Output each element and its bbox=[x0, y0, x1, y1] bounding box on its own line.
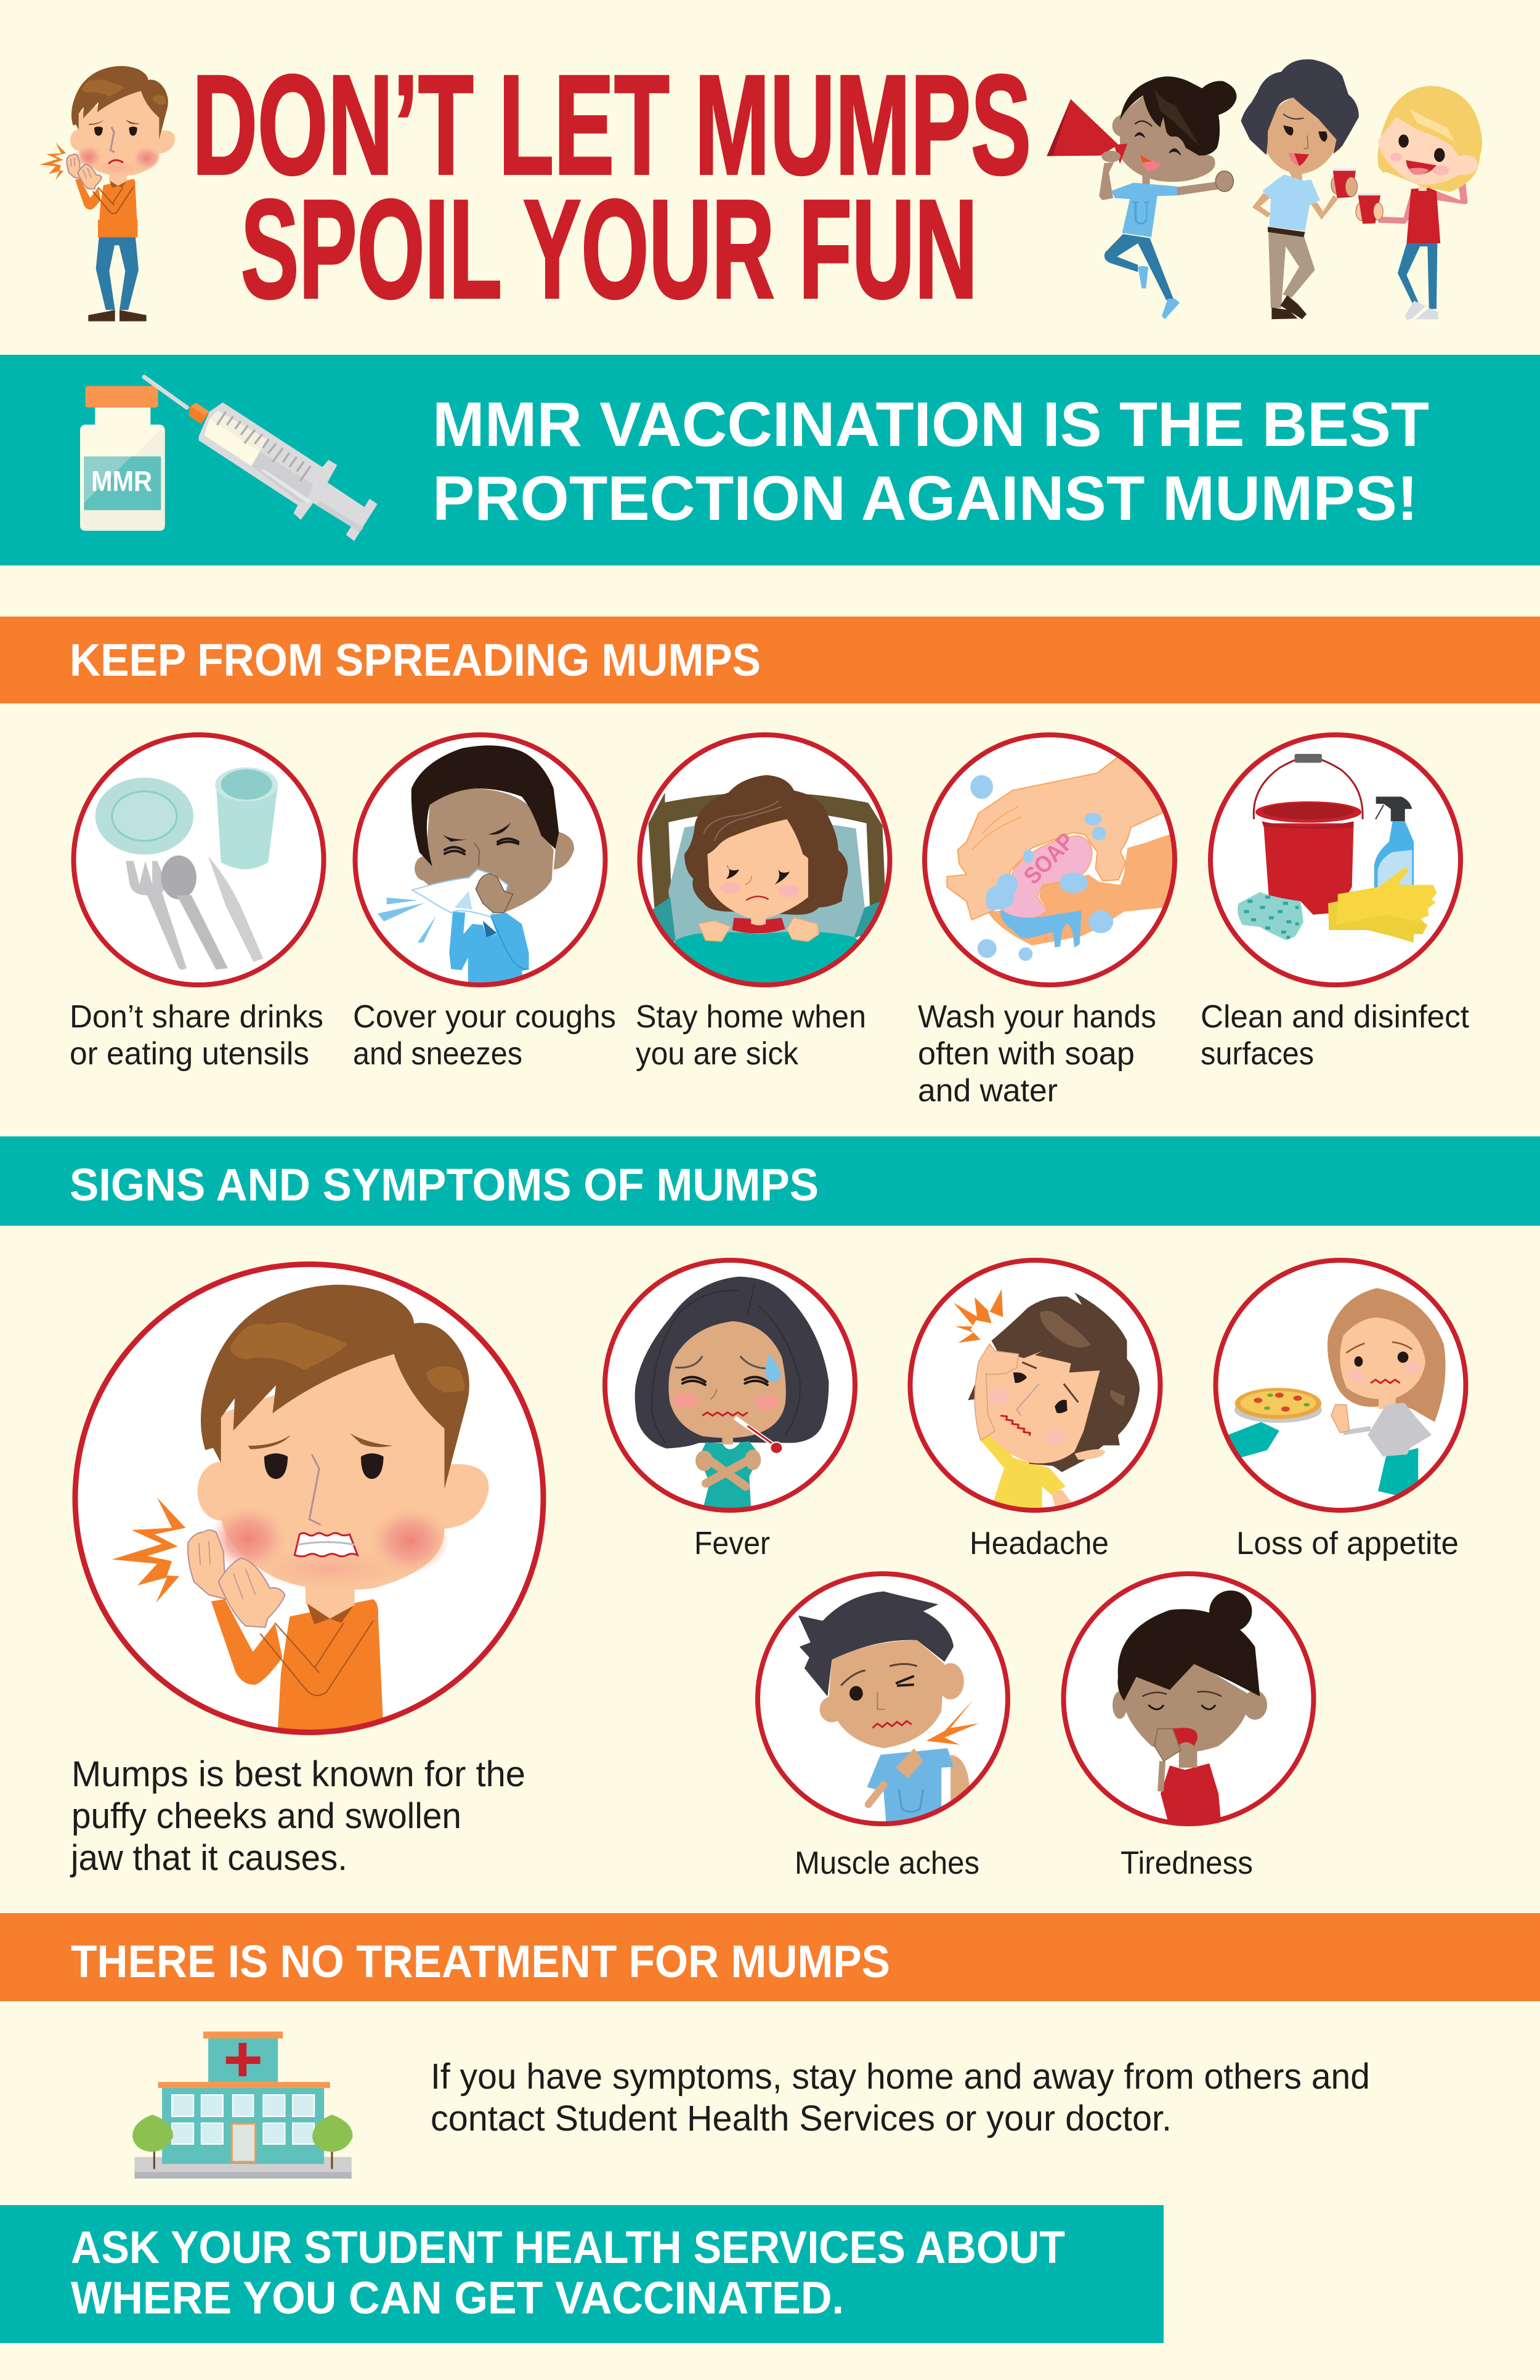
section: keep from spreading mumps: KEEP FROM SPREADING MUMPS bbox=[70, 634, 761, 686]
title: SPOIL YOUR FUN bbox=[241, 171, 978, 328]
label: fever: Fever bbox=[694, 1526, 770, 1561]
icon: cleaning supplies bbox=[1210, 735, 1461, 985]
icon: sick girl in bed bbox=[639, 735, 890, 990]
text: cover coughs: and sneezes bbox=[353, 1036, 522, 1072]
text: cover coughs: Cover your coughs bbox=[353, 999, 616, 1035]
text: clean surfaces bbox=[1201, 999, 1470, 1072]
label: headache: Headache bbox=[970, 1526, 1109, 1561]
callout: ask student health services: WHERE YOU CAN GET VACCINATED. bbox=[71, 2272, 844, 2323]
icon: muscle aches bbox=[758, 1574, 1008, 1828]
icon: man with cup bbox=[1241, 59, 1359, 319]
label: soap: SOAP bbox=[1019, 828, 1080, 889]
title: DON’T LET MUMPS bbox=[192, 46, 1031, 204]
icon: woman with cup bbox=[1356, 86, 1482, 320]
text: stay home: Stay home when bbox=[636, 999, 866, 1035]
text: mumps description: Mumps is best known for the bbox=[71, 1754, 525, 1794]
icon: fever bbox=[605, 1260, 855, 1511]
text: wash hands: and water bbox=[918, 1073, 1058, 1109]
icon: girl with megaphone bbox=[1047, 76, 1236, 319]
text: wash hands bbox=[918, 999, 1156, 1109]
callout: ask student health services: ASK YOUR STUDENT HEALTH SERVICES ABOUT bbox=[71, 2222, 1065, 2273]
text: clean surfaces: surfaces bbox=[1201, 1036, 1314, 1072]
text: stay home advice bbox=[431, 2057, 1370, 2139]
heading: MMR VACCINATION IS THE BEST bbox=[432, 389, 1429, 459]
text: clean surfaces: Clean and disinfect bbox=[1201, 999, 1470, 1035]
icon: covering a sneeze bbox=[355, 735, 605, 985]
sad mouth bbox=[108, 160, 123, 164]
icon: boy with swollen jaw bbox=[75, 1264, 543, 1735]
label: shirt letter: U bbox=[1132, 194, 1150, 232]
label: muscle aches: Muscle aches bbox=[795, 1845, 979, 1881]
text: mumps description bbox=[70, 1754, 525, 1878]
icon: MMR vial bbox=[80, 386, 165, 531]
section: signs and symptoms: SIGNS AND SYMPTOMS OF MUMPS bbox=[70, 1159, 819, 1210]
label: tiredness: Tiredness bbox=[1121, 1845, 1253, 1881]
text: stay home bbox=[636, 999, 866, 1072]
icon: boy with mumps bbox=[39, 66, 175, 322]
icon: friends having fun bbox=[1047, 59, 1482, 320]
icon: loss of appetite bbox=[1216, 1260, 1466, 1510]
text: mumps description: jaw that it causes. bbox=[70, 1838, 347, 1878]
icon: washing hands with soap bbox=[925, 735, 1184, 985]
banner: MMR vaccination bbox=[0, 355, 1540, 565]
text: stay home advice: contact Student Health Services or your doctor. bbox=[431, 2099, 1172, 2139]
text: wash hands: often with soap bbox=[918, 1036, 1135, 1072]
text: don't share drinks: or eating utensils bbox=[70, 1036, 309, 1072]
text: don't share drinks: Don’t share drinks bbox=[70, 999, 323, 1035]
icon: MMR vial: MMR bbox=[91, 465, 152, 497]
icon: tiredness bbox=[1063, 1574, 1313, 1828]
heading: PROTECTION AGAINST MUMPS! bbox=[432, 463, 1418, 533]
section: keep from spreading mumps bbox=[0, 617, 1540, 703]
text: wash hands: Wash your hands bbox=[918, 999, 1156, 1035]
text: stay home advice: If you have symptoms, stay home and away from others and bbox=[431, 2057, 1370, 2097]
text: don't share drinks bbox=[70, 999, 323, 1072]
icon: syringe bbox=[144, 377, 378, 541]
icon: utensils bbox=[74, 735, 324, 985]
text: stay home: you are sick bbox=[636, 1036, 799, 1072]
icon: hospital bbox=[132, 2031, 352, 2179]
section: signs and symptoms bbox=[0, 1136, 1540, 1226]
section: no treatment bbox=[0, 1913, 1540, 2001]
text: mumps description: puffy cheeks and swollen bbox=[71, 1796, 461, 1836]
text: cover coughs bbox=[353, 999, 616, 1072]
title bbox=[192, 46, 1031, 328]
label: loss of appetite: Loss of appetite bbox=[1236, 1526, 1459, 1561]
callout: ask student health services bbox=[0, 2205, 1164, 2343]
heading bbox=[432, 389, 1429, 533]
section: no treatment: THERE IS NO TREATMENT FOR MUMPS bbox=[71, 1936, 890, 1987]
icon: headache bbox=[910, 1260, 1161, 1513]
